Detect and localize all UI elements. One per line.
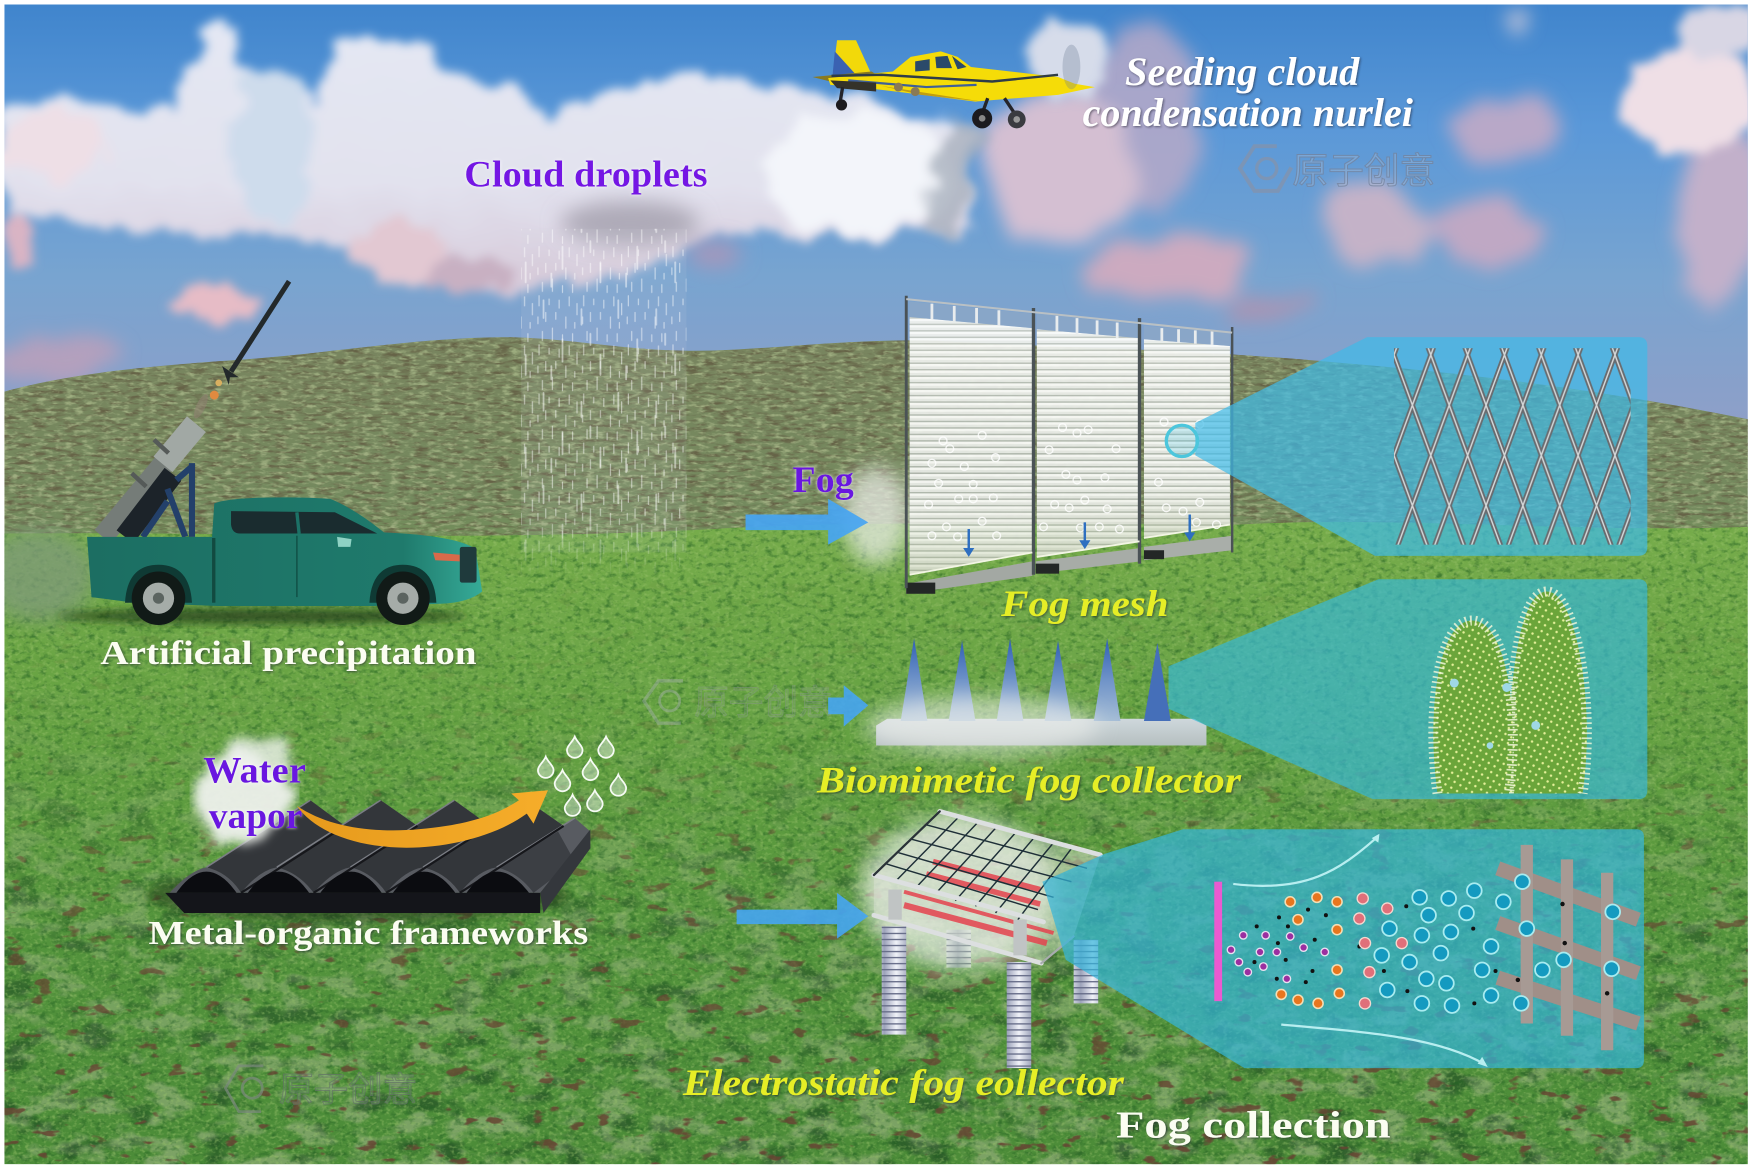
- aircraft: [812, 40, 1095, 128]
- cyan water droplets: [1374, 874, 1620, 1013]
- collector white glow: [862, 817, 1058, 969]
- mesh panel 2: [1037, 314, 1140, 557]
- propeller: [1062, 45, 1080, 89]
- collector cones: [901, 638, 1171, 721]
- label: Electrostatic fog eollector: Electrostatic fog eollector: [682, 1062, 1125, 1103]
- cactus closeup: [1433, 592, 1587, 794]
- MOF corrugated ridges: [170, 800, 590, 893]
- label: Fog mesh: Fog mesh: [1000, 583, 1169, 624]
- label: Seeding cloud condensation nurlei: [1083, 49, 1413, 135]
- background: green hill: [0, 329, 1750, 586]
- pickup truck with rocket launcher: [0, 281, 482, 625]
- label: Seeding cloud condensation nurlei: condensation nurlei: [1083, 90, 1413, 135]
- water vapor cloud: [199, 737, 290, 843]
- background: sky: [0, 0, 1750, 424]
- collector frame rails: [874, 811, 1100, 963]
- label: Cloud droplets: Cloud droplets: [464, 153, 708, 194]
- mesh droplets: [925, 418, 1220, 541]
- watermark: centre: [644, 681, 833, 723]
- collector back legs: [946, 930, 1098, 1003]
- arrow: fog towards mesh: [746, 499, 868, 545]
- MOF right side and front face: [165, 829, 590, 913]
- arrow: fog towards electrostatic collector: [737, 893, 868, 939]
- cockpit windows: [915, 56, 967, 71]
- collector front legs: [882, 890, 1031, 1068]
- label: Biomimetic fog collector: Biomimetic fog collector: [816, 759, 1242, 800]
- label: Fog collection: Fog collection: [1116, 1104, 1391, 1146]
- watermark: centre: 原子创意: [694, 684, 833, 722]
- truck wheels: [132, 571, 430, 625]
- watermark: top right: [1240, 146, 1435, 191]
- mesh arrows: water flowing down: [963, 515, 1195, 557]
- mesh panel 1: [910, 301, 1032, 575]
- collector plate between rails: [874, 811, 1100, 963]
- curved flow arrows: [1233, 837, 1485, 1065]
- grid electrode closeup: [1498, 845, 1638, 1050]
- zoom panel: mesh detail: [1166, 337, 1647, 556]
- black charge carriers: [1252, 902, 1609, 1005]
- arrow: orange curved vapor to water: [297, 790, 548, 848]
- zoom panel: cactus detail: [1169, 579, 1647, 799]
- mesh closeup lattice: [1394, 348, 1631, 545]
- landing gear: [840, 87, 1016, 115]
- exhaust dust: [0, 528, 95, 622]
- rain column below cloud droplets: [521, 229, 686, 577]
- background: grass field: [0, 513, 1750, 1169]
- biomimetic fog collector: [865, 638, 1206, 754]
- aircraft tail fin: [833, 40, 872, 76]
- fog mesh structure: [906, 296, 1232, 594]
- mesh frame posts and rails: [906, 296, 1232, 588]
- pink electrode bar: [1214, 882, 1222, 1001]
- watermark: lower left: [225, 1066, 417, 1112]
- label: Seeding cloud condensation nurlei: Seeding cloud: [1125, 49, 1360, 94]
- label: Water vapor: [203, 749, 306, 836]
- orange charged droplets: [1276, 892, 1344, 1008]
- label: Artificial precipitation: Artificial precipitation: [100, 635, 477, 672]
- fuselage: [828, 51, 1095, 102]
- truck body: [87, 497, 482, 606]
- label: Water vapor: vapor: [209, 795, 302, 836]
- icon: collected water droplets: [538, 737, 626, 816]
- arrow: fog towards biomimetic collector: [828, 685, 868, 727]
- MOF ground shadow: [145, 868, 569, 922]
- collector fog haze: [865, 696, 1099, 754]
- zoom panel: electrostatic detail: [1042, 829, 1644, 1068]
- watermark: top right: 原子创意: [1292, 151, 1435, 191]
- truck ground shadow: [56, 608, 469, 624]
- electrostatic fog collector: [862, 811, 1100, 1068]
- collector red plates: [904, 862, 1054, 943]
- purple charged droplets: [1227, 931, 1329, 983]
- mesh panel 3: [1144, 326, 1230, 538]
- pink charged droplets: [1354, 893, 1407, 1009]
- collector base slab: [876, 719, 1206, 746]
- launcher tubes: [103, 424, 196, 537]
- label: Water vapor: Water: [203, 749, 306, 790]
- collector grid: [874, 811, 1087, 920]
- mesh base blocks: [906, 536, 1232, 594]
- label: Metal-organic frameworks: Metal-organic frameworks: [148, 915, 588, 952]
- metal-organic frameworks sheet: [145, 800, 590, 922]
- rocket: [191, 281, 289, 420]
- cloud: aircraft seeding spray: [765, 113, 984, 237]
- zoom source circle: [1166, 425, 1198, 456]
- watermark: lower left: 原子创意: [279, 1072, 417, 1110]
- fog inflow cloud behind mesh: [843, 467, 910, 565]
- background: clouds: [0, 6, 1750, 379]
- label: Fog: Fog: [792, 459, 854, 500]
